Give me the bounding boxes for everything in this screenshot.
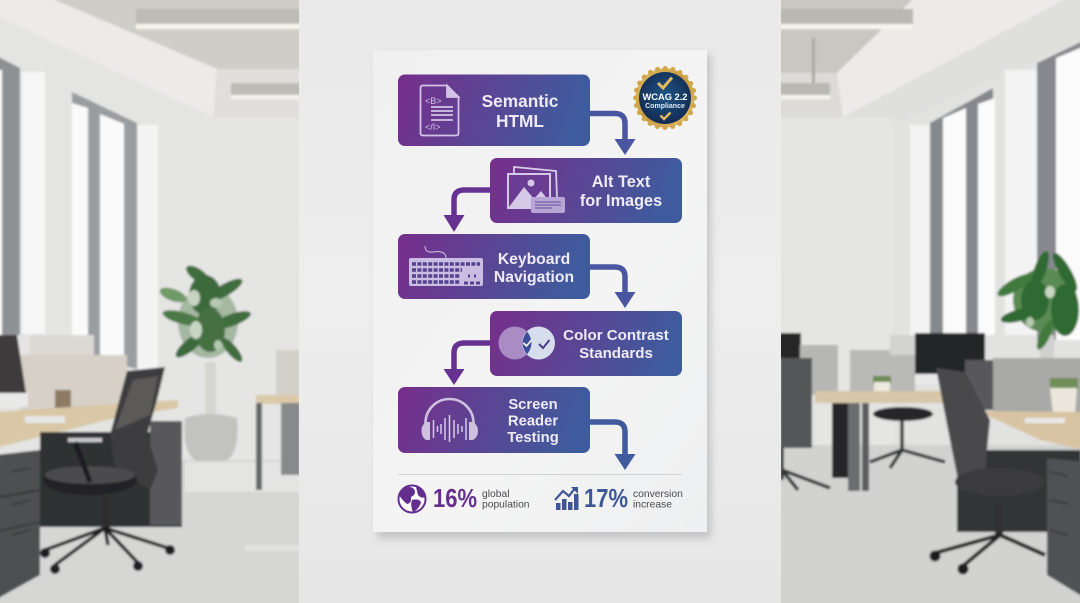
label: Semantic HTML: Semantic xyxy=(482,91,559,111)
icon: headphones with waveform xyxy=(422,399,478,442)
center wall panel xyxy=(299,0,781,603)
label: Keyboard Navigation: Navigation xyxy=(494,269,574,286)
stat: 17% conversion increase xyxy=(555,485,683,513)
icon: keyboard xyxy=(409,246,483,286)
icon: HTML document xyxy=(420,86,458,136)
arrow 4: color contrast to screen reader xyxy=(444,343,492,385)
WCAG compliance badge: Compliance xyxy=(645,103,685,110)
label: Color Contrast Standards: Color Contrast xyxy=(563,327,669,344)
icon: stacked images with caption xyxy=(508,167,565,213)
arrow 2: alt text to keyboard navigation xyxy=(444,190,492,232)
stat: 16% global population xyxy=(398,485,530,513)
label: Screen Reader Testing: Screen xyxy=(508,397,558,413)
label: Screen Reader Testing: Reader xyxy=(508,414,558,430)
card: Color Contrast Standards xyxy=(490,311,682,376)
poster xyxy=(373,50,711,538)
label: Alt Text for Images: for Images xyxy=(580,192,662,210)
office background: right side xyxy=(775,0,1080,603)
caption: global population: global xyxy=(482,489,509,500)
arrow 5: screen reader to stats xyxy=(588,422,636,470)
arrow 1: semantic HTML to alt text xyxy=(588,114,636,155)
caption: conversion increase: conversion xyxy=(633,489,683,500)
label: Alt Text for Images: Alt Text xyxy=(592,173,651,191)
WCAG compliance badge xyxy=(636,68,694,128)
value: 16%: 16% xyxy=(433,485,477,513)
card: Screen Reader Testing xyxy=(398,387,590,453)
WCAG compliance badge: WCAG 2.2 xyxy=(643,92,687,102)
caption: conversion increase: increase xyxy=(633,500,672,510)
icon: HTML document: <B> xyxy=(425,96,442,106)
caption: global population: population xyxy=(482,500,530,510)
icon: rising bar chart xyxy=(555,487,578,510)
label: Color Contrast Standards: Standards xyxy=(579,345,653,362)
card: Keyboard Navigation xyxy=(398,234,590,299)
icon: globe xyxy=(398,486,426,512)
icon: overlapping contrast circles xyxy=(498,326,555,360)
card: Alt Text for Images xyxy=(490,158,682,223)
divider xyxy=(398,474,682,476)
card: Semantic HTML xyxy=(398,74,590,146)
label: Semantic HTML: HTML xyxy=(496,111,544,131)
arrow 3: keyboard navigation to color contrast xyxy=(588,267,636,308)
label: Screen Reader Testing: Testing xyxy=(507,430,559,446)
office background: left side xyxy=(0,0,305,603)
value: 17%: 17% xyxy=(584,485,628,513)
icon: HTML document: </I> xyxy=(425,122,441,132)
label: Keyboard Navigation: Keyboard xyxy=(498,251,570,268)
